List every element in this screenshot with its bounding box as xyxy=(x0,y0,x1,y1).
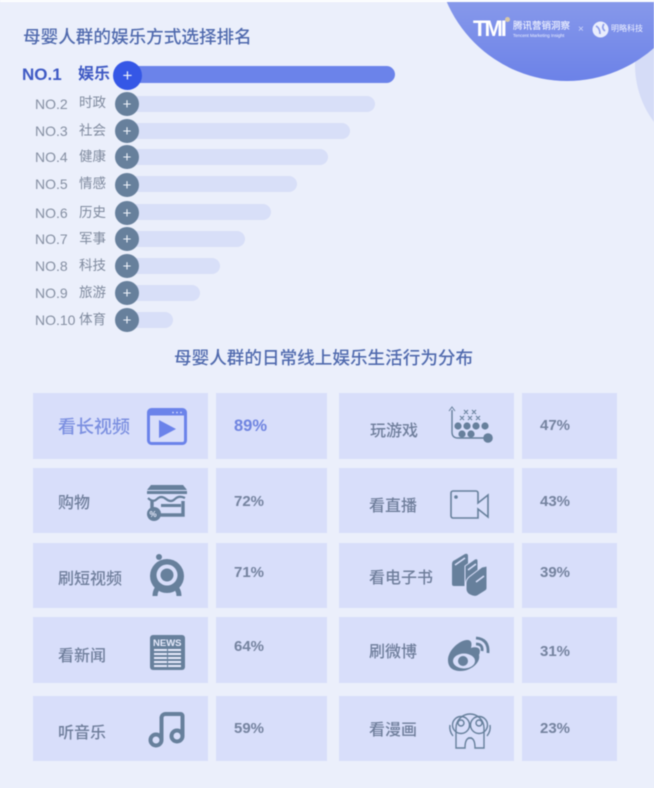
row 2: 时政 xyxy=(79,95,106,110)
logo: TMI x partner: × xyxy=(578,24,584,35)
card: 玩游戏 xyxy=(339,393,514,459)
row 9 xyxy=(35,280,200,306)
card: 刷微博 xyxy=(339,617,514,683)
card: 听音乐 xyxy=(33,696,208,761)
value: 39% xyxy=(522,543,617,608)
icon: books xyxy=(451,553,488,596)
logo: TMI x partner xyxy=(472,16,643,41)
title: ranking: 母婴人群的娱乐方式选择排名 xyxy=(23,27,252,47)
row 8: + xyxy=(123,258,131,275)
value: 72% xyxy=(216,468,327,533)
row 2: + xyxy=(123,96,131,113)
row 7: 军事 xyxy=(79,231,106,246)
row 1 xyxy=(22,60,396,91)
row 7: NO.7 xyxy=(35,231,68,247)
value: 89%: 89% xyxy=(234,417,267,435)
row 1: NO.1 xyxy=(22,65,62,84)
value: 47%: 47% xyxy=(540,417,570,434)
card: 购物: 购物 xyxy=(58,495,90,512)
row 7 xyxy=(35,226,245,252)
row 9: + xyxy=(123,285,131,302)
row 1: 娱乐 xyxy=(78,66,110,83)
card: 看漫画 xyxy=(339,696,514,761)
value: 31%: 31% xyxy=(540,643,570,660)
icon: shop xyxy=(146,484,188,522)
row 2: NO.2 xyxy=(35,96,68,112)
card: 刷短视频 xyxy=(33,543,208,608)
card: 看直播 xyxy=(339,468,514,533)
card: 玩游戏: 玩游戏 xyxy=(370,423,418,440)
row 10: NO.10 xyxy=(35,312,75,328)
row 4: 健康 xyxy=(79,149,106,164)
row 3: 社会 xyxy=(79,123,106,138)
row 6 xyxy=(35,200,271,226)
card: 看漫画: 看漫画 xyxy=(369,722,417,739)
card: 看新闻: 看新闻 xyxy=(58,648,106,665)
ranking chart xyxy=(22,60,396,333)
row 2 xyxy=(35,91,375,117)
icon: newspaper xyxy=(149,634,186,671)
row 3 xyxy=(35,118,350,144)
card: 刷短视频: 刷短视频 xyxy=(58,571,122,588)
row 9: NO.9 xyxy=(35,285,68,301)
row 10 xyxy=(35,307,173,333)
row 3: + xyxy=(123,123,131,140)
card: 看电子书 xyxy=(339,543,514,608)
row 8: NO.8 xyxy=(35,258,68,274)
icon: cartoon face xyxy=(448,712,492,750)
icon: music note xyxy=(148,711,186,748)
card: 看长视频 xyxy=(33,393,208,459)
row 10: 体育 xyxy=(79,312,106,327)
row 5: NO.5 xyxy=(35,176,68,192)
icon: video camera xyxy=(450,490,490,520)
logo: TMI x partner: 明略科技 xyxy=(611,24,643,33)
row 10: + xyxy=(123,312,131,329)
card: 刷微博: 刷微博 xyxy=(369,644,417,661)
row 6: NO.6 xyxy=(35,205,68,221)
row 7: + xyxy=(123,231,131,248)
logo: TMI x partner: 腾讯营销洞察 xyxy=(513,21,570,32)
value: 43% xyxy=(522,468,617,533)
card: 听音乐: 听音乐 xyxy=(58,725,106,742)
value: 64% xyxy=(216,617,327,683)
row 4: NO.4 xyxy=(35,149,68,165)
value: 23%: 23% xyxy=(540,720,570,737)
row 5: 情感 xyxy=(79,176,106,191)
row 4 xyxy=(35,144,328,170)
row 9: 旅游 xyxy=(79,285,106,300)
icon: webcam xyxy=(149,554,185,597)
value: 59%: 59% xyxy=(234,720,264,737)
value: 39%: 39% xyxy=(540,564,570,581)
row 4: + xyxy=(123,149,131,166)
row 6: 历史 xyxy=(79,205,106,220)
value: 43%: 43% xyxy=(540,493,570,510)
row 8: 科技 xyxy=(79,258,106,273)
value: 31% xyxy=(522,617,617,683)
value: 89% xyxy=(216,393,327,459)
value: 64%: 64% xyxy=(234,638,264,655)
value: 23% xyxy=(522,696,617,761)
card: 购物 xyxy=(33,468,208,533)
icon: video player xyxy=(146,407,188,446)
row 5 xyxy=(35,172,297,198)
card: 看电子书: 看电子书 xyxy=(369,570,433,587)
value: 72%: 72% xyxy=(234,493,264,510)
logo: TMI x partner: Tencent Marketing Insight xyxy=(513,33,564,38)
card: 看新闻 xyxy=(33,617,208,683)
row 8 xyxy=(35,253,220,279)
icon: tactics board xyxy=(448,406,494,444)
row 5: + xyxy=(123,177,131,194)
icon: newspaper: NEWS xyxy=(153,638,182,649)
logo: TMI x partner: TMI xyxy=(473,16,505,41)
icon: shop: % xyxy=(150,510,157,519)
row 6: + xyxy=(123,205,131,222)
card: 看直播: 看直播 xyxy=(369,498,417,515)
icon: weibo xyxy=(447,636,490,672)
value: 47% xyxy=(522,393,617,459)
row 3: NO.3 xyxy=(35,123,68,139)
value: 71% xyxy=(216,543,327,608)
value: 59% xyxy=(216,696,327,761)
row 1: + xyxy=(123,66,132,85)
value: 71%: 71% xyxy=(234,564,264,581)
title: behaviour distribution: 母婴人群的日常线上娱乐生活行为分布 xyxy=(174,348,473,368)
card: 看长视频: 看长视频 xyxy=(58,417,130,437)
